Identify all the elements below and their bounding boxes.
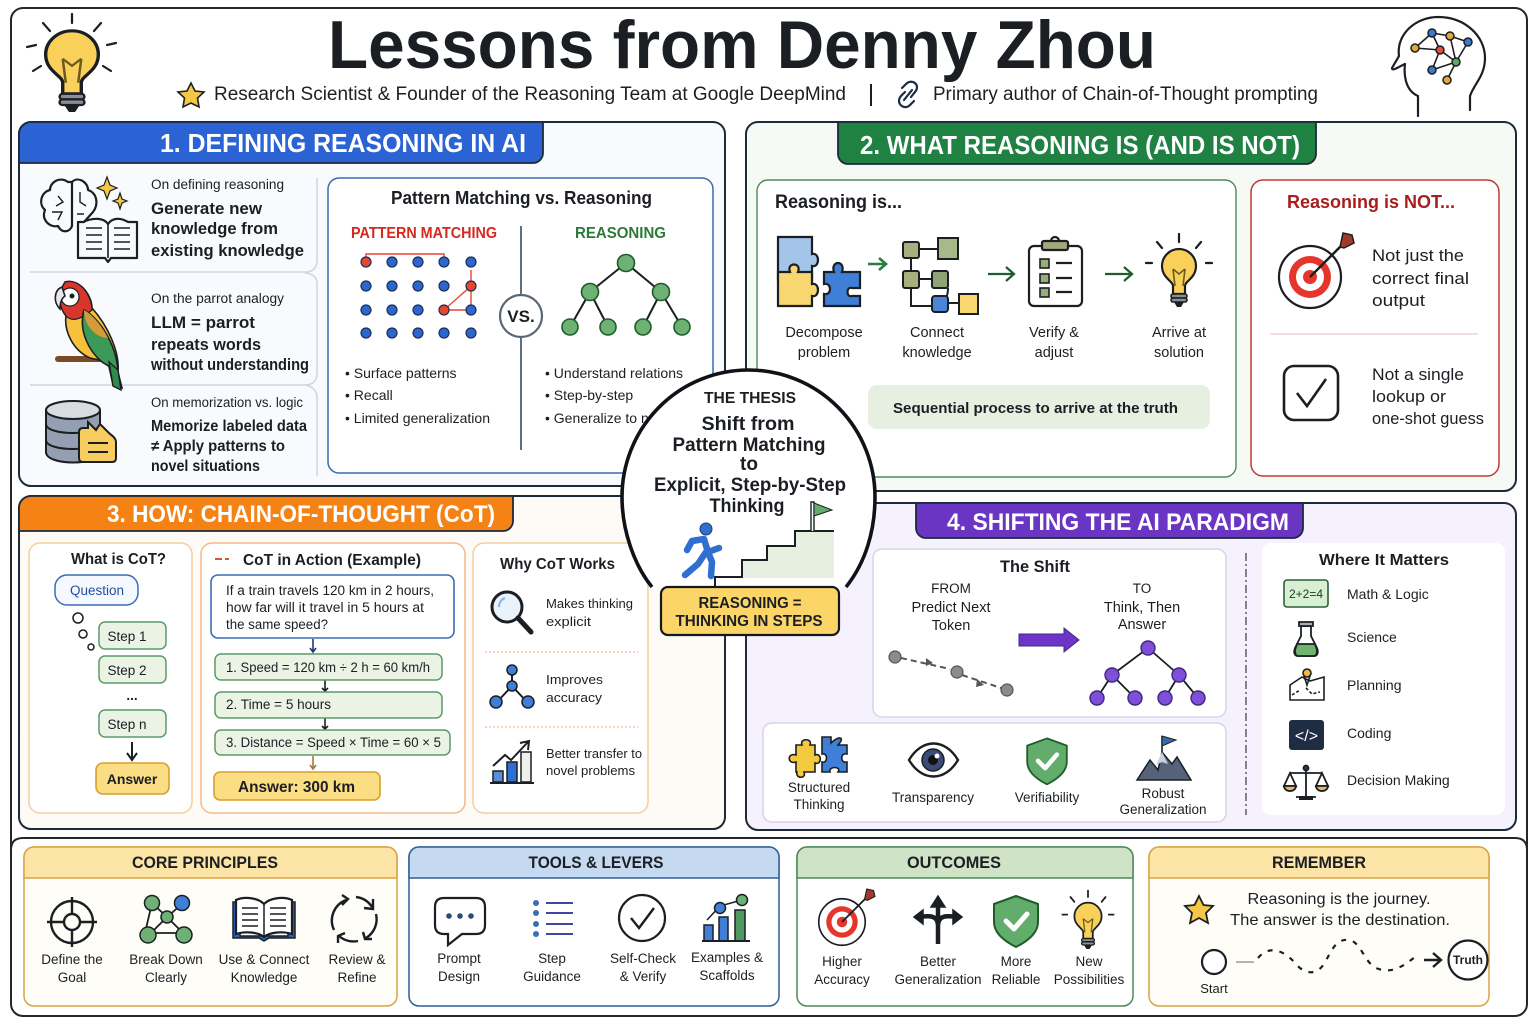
label: & Verify — [620, 969, 667, 984]
label: Planning — [1347, 677, 1402, 693]
icon: code — [1289, 720, 1324, 750]
subtitle authorship: Primary author of Chain-of-Thought prompting — [933, 84, 1318, 105]
icon: clipboard — [1029, 237, 1082, 306]
label: reasoning: REASONING — [575, 225, 666, 242]
diagram: reasoning tree — [562, 254, 690, 335]
step 1: 1. Speed = 120 km ÷ 2 h = 60 km/h — [226, 660, 430, 675]
text: explicit: Makes thinking — [546, 596, 633, 611]
icon: step list — [533, 900, 573, 937]
text: memorization vs logic: Memorize labeled data — [151, 418, 307, 435]
card: where it matters — [1262, 543, 1505, 815]
icon: check circle — [619, 895, 665, 941]
arrow — [1105, 267, 1132, 281]
icon: target — [1279, 233, 1354, 308]
icon: checkbox — [1284, 366, 1338, 420]
problem statement: how far will it travel in 5 hours at — [226, 600, 424, 615]
label: Robust — [1142, 786, 1185, 801]
arrow — [127, 742, 137, 760]
icon: growth chart — [490, 741, 534, 783]
list: reasoning traits: • Step-by-step — [545, 387, 633, 403]
icon: connected knowledge — [903, 238, 978, 314]
text: not final output: Not just the — [1372, 246, 1464, 265]
label: Structured — [788, 780, 850, 795]
card: CoT in action — [201, 543, 465, 813]
heading: section 3 — [19, 496, 513, 531]
problem statement: If a train travels 120 km in 2 hours, — [226, 583, 434, 598]
label: Goal — [58, 970, 86, 985]
step labels: ... — [126, 688, 138, 703]
card: reasoning is not — [1251, 180, 1499, 476]
card heading: CoT in Action (Example) — [243, 552, 421, 569]
band: core principles — [24, 847, 397, 1006]
text: not final output — [1372, 246, 1469, 310]
panel: 1 defining reasoning in AI — [19, 122, 725, 486]
text: transfer: Better transfer to — [546, 746, 642, 761]
label: Scaffolds — [699, 968, 755, 983]
text: memorization vs logic: novel situations — [151, 458, 260, 475]
text: transfer — [546, 746, 642, 778]
card heading: Pattern Matching vs. Reasoning — [391, 188, 652, 208]
label: Break Down — [129, 952, 203, 967]
label: Reliable — [992, 972, 1040, 987]
icon: open book — [233, 898, 295, 941]
band heading — [24, 847, 397, 878]
badge: vs: VS. — [507, 307, 535, 326]
label: New — [1075, 954, 1103, 969]
text: defining reasoning — [151, 177, 304, 260]
heading: section 1 — [19, 122, 543, 163]
thesis circle — [622, 370, 875, 635]
icon: mountain with flag — [1137, 736, 1191, 780]
title: Lessons from Denny Zhou — [328, 7, 1156, 83]
list: reasoning traits — [545, 365, 683, 426]
text: accuracy: accuracy — [546, 690, 603, 705]
band: outcomes — [797, 847, 1133, 1006]
step labels: problem — [798, 345, 850, 361]
label: Transparency — [892, 790, 974, 805]
icon: shield — [1027, 738, 1067, 784]
icon: target — [819, 889, 875, 945]
icon: map — [1290, 669, 1324, 700]
answer: Answer: 300 km — [238, 779, 355, 796]
label: Coding — [1347, 725, 1391, 741]
callout: reasoning equals thinking in steps — [661, 587, 839, 635]
step 3 — [215, 730, 450, 755]
thought bubbles — [73, 613, 94, 650]
text: not a lookup — [1372, 365, 1484, 428]
label: Better — [920, 954, 957, 969]
thesis statement: Explicit, Step-by-Step — [654, 475, 846, 496]
text: from: Token — [932, 618, 970, 634]
icon: stairs with flag — [715, 502, 834, 588]
step labels: adjust — [1035, 345, 1073, 361]
icon: parrot — [55, 281, 122, 390]
label: pattern matching: PATTERN MATCHING — [351, 225, 497, 242]
arrow — [988, 267, 1014, 281]
heading: section 1: 1. DEFINING REASONING IN AI — [160, 128, 526, 158]
text: defining reasoning: existing knowledge — [151, 241, 304, 260]
panel: 4 shifting the AI paradigm — [746, 503, 1516, 830]
label: Guidance — [523, 969, 581, 984]
card: benefits — [763, 723, 1226, 822]
icon: head with network — [1392, 17, 1485, 116]
band heading: REMEMBER — [1272, 854, 1366, 872]
label: Define the — [41, 952, 103, 967]
label: truth: Truth — [1453, 953, 1483, 967]
icon: runner — [685, 523, 719, 576]
label: Design — [438, 969, 480, 984]
text: transfer: novel problems — [546, 763, 636, 778]
thesis statement: Thinking — [710, 496, 784, 517]
thesis label: THE THESIS — [704, 390, 796, 407]
label: Thinking — [793, 797, 845, 812]
diagram: token chain — [889, 651, 1013, 696]
step 2: 2. Time = 5 hours — [226, 697, 331, 712]
label: Decision Making — [1347, 772, 1450, 788]
band heading — [409, 847, 779, 878]
heading: section 3: 3. HOW: CHAIN-OF-THOUGHT (CoT) — [107, 501, 495, 528]
text: memorization vs logic: ≠ Apply patterns to — [151, 438, 285, 455]
icon: refresh cycle — [332, 895, 377, 943]
answer — [214, 772, 380, 800]
callout: sequential process — [868, 385, 1210, 429]
step labels: Step n — [107, 717, 147, 732]
band heading — [1149, 847, 1489, 878]
text: from: FROM — [931, 581, 971, 596]
arrow — [868, 258, 886, 270]
step 2 — [215, 692, 442, 718]
text: to: Answer — [1118, 617, 1166, 633]
icon: scale — [1284, 766, 1328, 798]
text: memorization vs logic: On memorization vs. logic — [151, 395, 303, 410]
text: memorization vs logic — [151, 395, 307, 475]
card: the shift — [873, 549, 1226, 717]
quote — [1230, 891, 1450, 929]
step labels — [107, 629, 147, 732]
quote: The answer is the destination. — [1230, 912, 1450, 929]
text: parrot analogy: repeats words — [151, 335, 261, 354]
list: pattern matching traits — [345, 365, 490, 426]
band heading: OUTCOMES — [907, 854, 1001, 872]
step 3: 3. Distance = Speed × Time = 60 × 5 — [226, 735, 441, 750]
label: Self-Check — [610, 951, 676, 966]
card: why CoT works — [473, 543, 648, 813]
icon: database and document — [46, 401, 116, 462]
icon: equation — [1284, 580, 1328, 607]
quote: Reasoning is the journey. — [1248, 891, 1430, 908]
text: not a lookup: Not a single — [1372, 365, 1464, 384]
step labels: Connect — [910, 325, 964, 341]
icon: link — [899, 82, 917, 107]
callout: sequential process: Sequential process to arrive at the truth — [893, 400, 1178, 417]
label: Possibilities — [1054, 972, 1125, 987]
band heading: CORE PRINCIPLES — [132, 854, 278, 872]
heading: section 4 — [916, 503, 1303, 538]
card heading: Reasoning is NOT... — [1287, 191, 1455, 212]
icon: puzzle pieces — [789, 737, 847, 777]
icon: puzzle — [778, 237, 860, 306]
node: question — [55, 575, 138, 605]
list: reasoning traits: • Understand relations — [545, 365, 683, 381]
label: Review & — [328, 952, 386, 967]
list: pattern matching traits: • Surface patterns — [345, 365, 457, 381]
step labels: Step 1 — [107, 629, 147, 644]
label: Higher — [822, 954, 862, 969]
step 1 — [215, 654, 442, 680]
text: from — [912, 581, 990, 634]
icon: network — [140, 896, 192, 943]
label: Knowledge — [231, 970, 297, 985]
step labels: Arrive at — [1152, 325, 1206, 341]
icon: crosshair — [47, 897, 97, 947]
diagram: pattern dots — [361, 254, 476, 338]
arrow: shift — [1019, 628, 1079, 652]
icon: star — [1185, 896, 1213, 923]
label: Verifiability — [1015, 790, 1080, 805]
list: reasoning traits: • Generalize to novel — [545, 410, 674, 426]
step labels: Verify & — [1029, 325, 1079, 341]
text: not final output: output — [1372, 291, 1425, 310]
text: defining reasoning: Generate new — [151, 199, 263, 218]
callout: reasoning equals thinking in steps: THINKING IN STEPS — [676, 613, 822, 630]
text: accuracy: Improves — [546, 672, 604, 687]
band heading: TOOLS & LEVERS — [528, 854, 664, 872]
label: start: Start — [1200, 981, 1228, 996]
label: Science — [1347, 629, 1397, 645]
badge: vs — [500, 295, 542, 337]
card heading: Why CoT Works — [500, 556, 615, 573]
step labels: knowledge — [902, 345, 972, 361]
icon: magnifier — [492, 592, 531, 632]
icon: eye — [909, 744, 958, 776]
label: Prompt — [437, 951, 481, 966]
callout: reasoning equals thinking in steps: REASONING = — [698, 595, 802, 612]
thesis statement — [654, 414, 846, 517]
card: what is CoT — [29, 543, 192, 813]
icon: star — [178, 83, 204, 107]
text: parrot analogy — [150, 291, 309, 374]
list: pattern matching traits: • Recall — [345, 387, 393, 403]
text: to: TO — [1133, 581, 1151, 596]
text: explicit: explicit — [546, 614, 591, 629]
node: question: Question — [70, 583, 124, 598]
icon: code: </> — [1295, 728, 1318, 745]
panel: 2 what reasoning is and is not — [746, 122, 1516, 491]
step labels — [785, 325, 1206, 361]
text: parrot analogy: without understanding — [150, 355, 309, 374]
label: Clearly — [145, 970, 187, 985]
label: Generalization — [1119, 802, 1207, 817]
list: pattern matching traits: • Limited generalization — [345, 410, 490, 426]
text: not a lookup: lookup or — [1372, 387, 1446, 406]
text: not a lookup: one-shot guess — [1372, 409, 1484, 428]
card heading: Where It Matters — [1319, 552, 1449, 569]
card heading: The Shift — [1000, 558, 1070, 576]
thesis statement: Shift from — [702, 414, 794, 435]
label: Use & Connect — [219, 952, 310, 967]
label: Refine — [337, 970, 377, 985]
icon: lightbulb — [27, 14, 116, 112]
problem statement — [211, 575, 454, 638]
label: Examples & — [691, 950, 763, 965]
step labels: Decompose — [785, 325, 863, 341]
icon: lightbulb — [1062, 891, 1114, 949]
icon: speech bubble — [435, 898, 485, 945]
text: to: Think, Then — [1104, 600, 1180, 616]
text: parrot analogy: LLM = parrot — [151, 313, 255, 332]
card: pattern matching vs reasoning — [328, 178, 713, 473]
icon: chart — [702, 894, 750, 941]
icon: lightbulb — [1146, 234, 1212, 307]
label: Step — [538, 951, 566, 966]
band: tools and levers — [409, 847, 779, 1006]
heading: section 2 — [838, 122, 1316, 164]
heading: section 2: 2. WHAT REASONING IS (AND IS NOT) — [860, 130, 1300, 160]
text: defining reasoning: On defining reasoning — [151, 177, 284, 192]
heading: section 4: 4. SHIFTING THE AI PARADIGM — [947, 509, 1289, 536]
problem statement: the same speed? — [226, 617, 328, 632]
icon: flask — [1294, 622, 1318, 656]
card heading: Reasoning is... — [775, 192, 902, 213]
text: to — [1104, 581, 1180, 633]
icon: brain and book — [41, 177, 137, 262]
diagram: purple tree — [1090, 641, 1205, 705]
diagram: journey path — [1202, 940, 1488, 980]
text: accuracy — [546, 672, 604, 705]
thesis statement: Pattern Matching — [672, 435, 826, 456]
label: More — [1001, 954, 1031, 969]
icon: diverging arrows — [914, 896, 962, 944]
text: parrot analogy: On the parrot analogy — [151, 291, 284, 306]
icon: equation: 2+2=4 — [1289, 587, 1323, 601]
icon: shield — [994, 896, 1038, 947]
subtitle — [178, 82, 1318, 107]
text: explicit — [546, 596, 633, 629]
icon: network — [490, 665, 534, 708]
panel: 3 how chain of thought — [19, 496, 725, 829]
node: answer — [96, 763, 169, 794]
node: answer: Answer — [107, 771, 158, 787]
label: Accuracy — [814, 972, 870, 987]
card heading: What is CoT? — [71, 551, 166, 568]
flow arrows — [310, 639, 328, 769]
band: remember — [1149, 847, 1489, 1006]
steps list — [99, 622, 166, 737]
thesis statement: to — [740, 454, 758, 475]
band heading — [797, 847, 1133, 878]
text: from: Predict Next — [912, 600, 990, 616]
step labels: Step 2 — [107, 663, 147, 678]
label: Math & Logic — [1347, 586, 1429, 602]
text: defining reasoning: knowledge from — [151, 219, 278, 238]
step labels: solution — [1154, 345, 1204, 361]
card: reasoning is — [757, 180, 1236, 477]
subtitle role: Research Scientist & Founder of the Reasoning Team at Google DeepMind — [214, 84, 846, 105]
label: Generalization — [894, 972, 982, 987]
text: not final output: correct final — [1372, 269, 1469, 288]
